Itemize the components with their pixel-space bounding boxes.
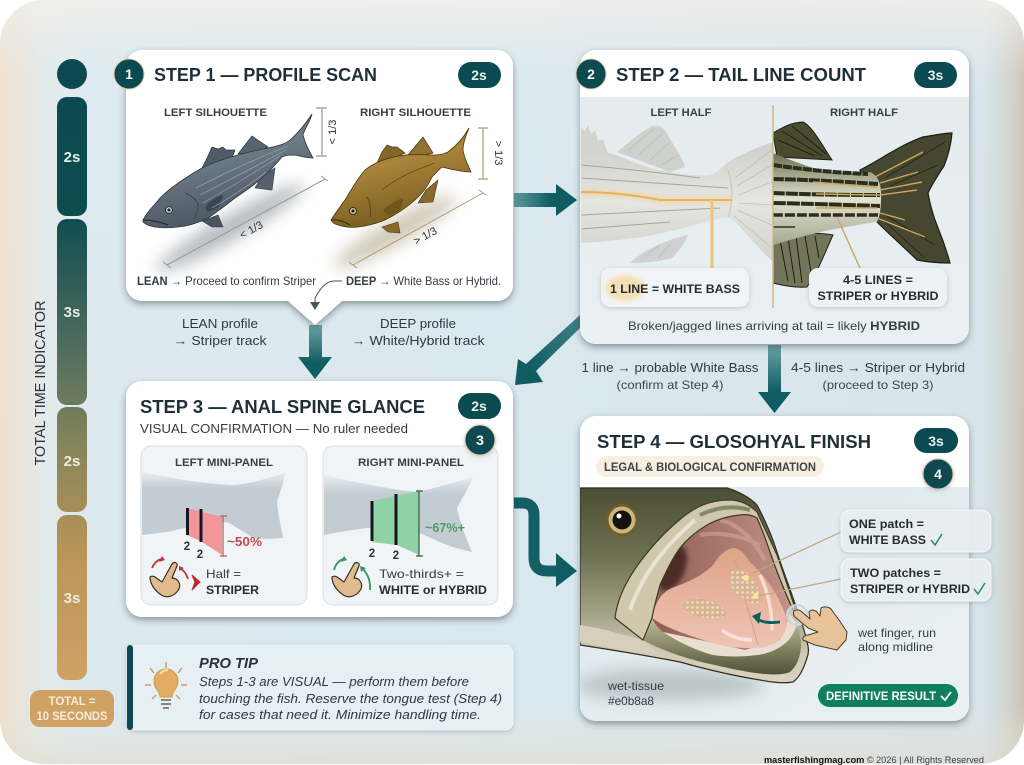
panel: pro tip (127, 645, 513, 730)
pro tip text: touching the fish. Reserve the tongue test (Step 4) (199, 692, 502, 706)
deep track label: → White/Hybrid track (352, 334, 485, 348)
lean outcome text: LEAN → Proceed to confirm Striper (137, 274, 316, 288)
right fish silhouette (324, 475, 473, 552)
wet finger note (857, 626, 936, 654)
right mini panel (323, 446, 498, 605)
divider (772, 105, 774, 308)
arrow: step 3 to step 4 (514, 503, 577, 587)
lean track label (174, 317, 267, 348)
deep track label (352, 317, 485, 348)
striper track label: (proceed to Step 3) (822, 378, 934, 392)
white bass track label (582, 361, 758, 392)
icon: hand with red arrows (150, 556, 200, 597)
total badge (30, 690, 114, 727)
right mini panel label: RIGHT MINI-PANEL (358, 457, 464, 469)
definitive result badge (818, 684, 958, 707)
left half fish (581, 125, 773, 270)
step 1 time pill (458, 62, 501, 88)
lean fish height bracket: < 1/3 (327, 120, 339, 144)
segment: 3s (57, 219, 87, 405)
spine counts right: 2 (393, 550, 399, 562)
eye (606, 504, 638, 536)
callout: 4-5 lines: 4-5 LINES = (843, 273, 913, 287)
timeline label: TOTAL TIME INDICATOR (33, 300, 49, 466)
icon: wet finger hand (787, 605, 847, 650)
tail image (580, 97, 969, 344)
lean fish height bracket (316, 108, 339, 156)
arrow: step 2 to step 3 (515, 315, 580, 385)
tongue arrow (752, 612, 780, 624)
striper track label: 4-5 lines → Striper or Hybrid (791, 361, 965, 375)
segment: 2s second (57, 407, 87, 512)
pro tip text: for cases that need it. Minimize handling time. (199, 708, 481, 722)
panel: step 4 (575, 416, 991, 721)
step 2 time pill (914, 62, 957, 88)
wet finger note: wet finger, run (857, 626, 936, 640)
left mini panel label: LEFT MINI-PANEL (175, 457, 273, 469)
step 1 title: STEP 1 — PROFILE SCAN (154, 64, 377, 85)
left half label: LEFT HALF (650, 107, 712, 119)
50 percent label: ~50% (227, 534, 262, 549)
step 3 time pill: 2s (471, 398, 487, 414)
segment: 3s: 3s (64, 304, 80, 321)
half striper text (206, 567, 259, 597)
pro tip heading: PRO TIP (199, 655, 259, 672)
wet finger note: along midline (858, 640, 933, 654)
two-thirds text (379, 567, 487, 597)
deep fish length line (349, 190, 486, 268)
segment: 3s second: 3s (64, 590, 80, 607)
deep outcome text: DEEP → White Bass or Hybrid. (346, 274, 501, 288)
step 4 time pill (914, 428, 958, 453)
segment: 2s: 2s (64, 149, 80, 166)
glossal patches (682, 569, 762, 618)
step 1 badge: 1 (125, 66, 133, 82)
wet tissue note: #e0b8a8 (608, 694, 654, 708)
deep fish height bracket: > 1/3 (492, 141, 504, 165)
callout: two patches: STRIPER or HYBRID (850, 582, 970, 596)
spine counts right: 2 (369, 548, 375, 560)
callout: two patches: TWO patches = (850, 566, 941, 580)
total badge: 10 SECONDS (36, 711, 108, 723)
striper track label (791, 361, 965, 392)
total time indicator (30, 59, 114, 727)
step 3 badge: 3 (476, 432, 484, 448)
white bass track label: 1 line → probable White Bass (582, 361, 758, 375)
icon: hand with green arrows (332, 556, 370, 597)
hybrid note: Broken/jagged lines arriving at tail = likely HYBRID (628, 319, 920, 333)
right half fish (773, 122, 952, 287)
two-thirds text: WHITE or HYBRID (379, 583, 487, 597)
lean fish length line (163, 176, 328, 268)
right half label: RIGHT HALF (830, 107, 898, 119)
step 2 time pill: 3s (928, 67, 943, 83)
callout: 4-5 lines: STRIPER or HYBRID (818, 289, 939, 303)
lean track label: LEAN profile (182, 317, 258, 331)
step 4 badge (923, 459, 953, 489)
panel: step 2 (576, 50, 969, 344)
green fin overlay (372, 491, 419, 555)
spines (188, 508, 227, 556)
pro tip text (199, 675, 502, 722)
67 percent label: ~67%+ (425, 520, 465, 535)
upper lip (615, 500, 795, 640)
step 4 title: STEP 4 — GLOSOHYAL FINISH (597, 431, 871, 452)
step 2 badge (576, 59, 606, 89)
spines right (372, 491, 423, 556)
pro tip text: Steps 1-3 are VISUAL — perform them before (199, 675, 469, 689)
lower jaw (644, 619, 801, 674)
mouth cavity (652, 515, 797, 656)
spine counts: 2 (197, 549, 203, 561)
lean fish (143, 114, 313, 281)
callout: 1 line (601, 268, 749, 307)
step 2 badge: 2 (587, 66, 595, 82)
deep fish length line: > 1/3 (412, 225, 439, 248)
step 3 title: STEP 3 — ANAL SPINE GLANCE (140, 396, 425, 417)
callout: 4-5 lines (809, 268, 947, 307)
definitive result badge: DEFINITIVE RESULT (826, 691, 936, 703)
lean track label: → Striper track (174, 334, 267, 348)
deep fish (328, 128, 471, 277)
step 3 badge (465, 425, 495, 455)
arrow: step 2 to step 4 (758, 345, 791, 413)
callout: 1 line: 1 LINE = WHITE BASS (610, 282, 740, 296)
right silhouette label: RIGHT SILHOUETTE (360, 107, 471, 119)
step 3 subtitle: VISUAL CONFIRMATION — No ruler needed (140, 421, 408, 436)
step 4 time pill: 3s (928, 433, 944, 449)
step 4 badge: 4 (934, 466, 942, 482)
head (580, 488, 808, 683)
half striper text: Half = (206, 567, 241, 581)
segment: 2s second: 2s (64, 453, 80, 470)
segment: 3s second (57, 515, 87, 680)
wet tissue note (607, 679, 664, 708)
mouth illustration (575, 487, 969, 721)
leader lines (753, 532, 841, 596)
left fish silhouette (142, 472, 285, 539)
left mini panel (141, 446, 307, 605)
total badge: TOTAL = (49, 696, 96, 708)
callout: two patches (841, 559, 991, 601)
white bass track label: (confirm at Step 4) (616, 378, 724, 392)
wet tissue note: wet-tissue (607, 679, 664, 693)
two-thirds text: Two-thirds+ = (379, 567, 464, 581)
spine counts (184, 541, 203, 561)
arrow: step 1 to step 2 (514, 184, 577, 216)
red fin overlay (187, 508, 222, 555)
small curved arrow (310, 281, 342, 310)
callout: one patch: WHITE BASS (849, 533, 926, 547)
icon: light bulb (145, 662, 187, 708)
footer: masterfishingmag.com © 2026 | All Rights Reserved (764, 755, 984, 765)
spine counts right (369, 548, 399, 562)
deep track label: DEEP profile (380, 317, 456, 331)
step 3 time pill (458, 393, 501, 419)
confirmation pill: LEGAL & BIOLOGICAL CONFIRMATION (604, 462, 816, 474)
left silhouette label: LEFT SILHOUETTE (164, 107, 267, 119)
timeline start dot (57, 59, 87, 89)
step 1 badge (114, 59, 144, 89)
lean fish length line: < 1/3 (238, 219, 265, 242)
half striper text: STRIPER (206, 583, 259, 597)
deep fish height bracket (478, 128, 504, 179)
tongue (652, 548, 787, 648)
step 1 time pill: 2s (471, 67, 487, 83)
arrow: step 1 to step 3 (298, 325, 332, 379)
segment: 2s (57, 97, 87, 216)
spine counts: 2 (184, 541, 190, 553)
callout: one patch: ONE patch = (849, 517, 924, 531)
panel: step 3 (126, 381, 513, 617)
step 2 title: STEP 2 — TAIL LINE COUNT (616, 64, 867, 85)
confirmation pill (596, 456, 824, 477)
callout: one patch (841, 510, 991, 552)
panel: step 1 (114, 50, 513, 325)
